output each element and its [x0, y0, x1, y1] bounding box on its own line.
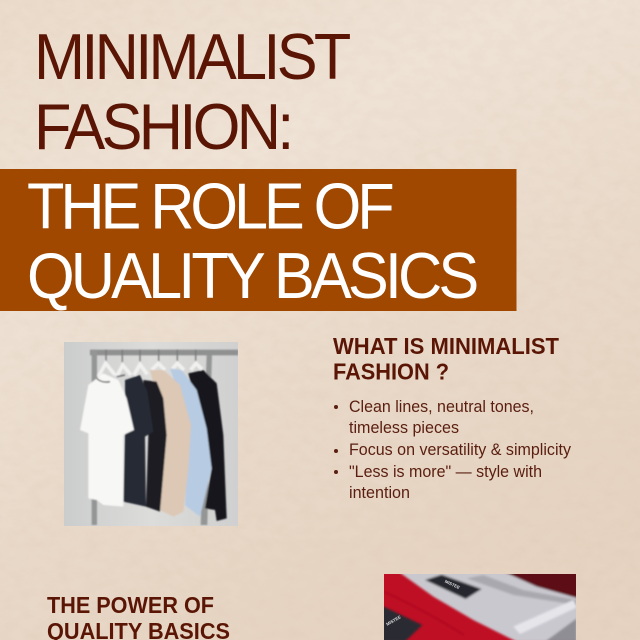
beige shirt: [150, 370, 191, 517]
bullet list: [334, 397, 571, 502]
bullet list: Clean lines, neutral tones,: [349, 397, 534, 416]
photo: folded red and grey garments: [382, 572, 578, 640]
heading: the power of quality basics: [47, 592, 230, 640]
title: minimalist fashion: MINIMALIST: [34, 22, 351, 93]
dark shirt: [143, 380, 167, 512]
heading: the power of quality basics: THE POWER OF: [47, 592, 214, 618]
title banner: THE ROLE OF: [27, 171, 395, 243]
heading: what is minimalist fashion: WHAT IS MINIMALIST: [333, 333, 559, 359]
title banner: QUALITY BASICS: [27, 241, 479, 312]
white shirt: [80, 373, 134, 507]
title banner: [0, 169, 516, 312]
black long shirt: [188, 370, 227, 521]
heading: what is minimalist fashion: [333, 333, 559, 384]
garment label text: MISTEE: [444, 579, 461, 590]
bullet list: "Less is more" — style with: [349, 462, 542, 481]
light blue shirt: [170, 368, 212, 517]
photo: clothes rack with shirts: [64, 342, 238, 526]
heading: what is minimalist fashion: FASHION ?: [333, 358, 449, 384]
title: minimalist fashion: [34, 22, 351, 163]
navy shirt: [123, 375, 153, 507]
bullet list: timeless pieces: [349, 418, 459, 437]
photo: folded red and grey garments: MISTEE: [385, 614, 402, 627]
bullet list: intention: [349, 483, 410, 502]
title: minimalist fashion: FASHION:: [34, 92, 294, 163]
bullet list: Focus on versatility & simplicity: [349, 440, 571, 459]
